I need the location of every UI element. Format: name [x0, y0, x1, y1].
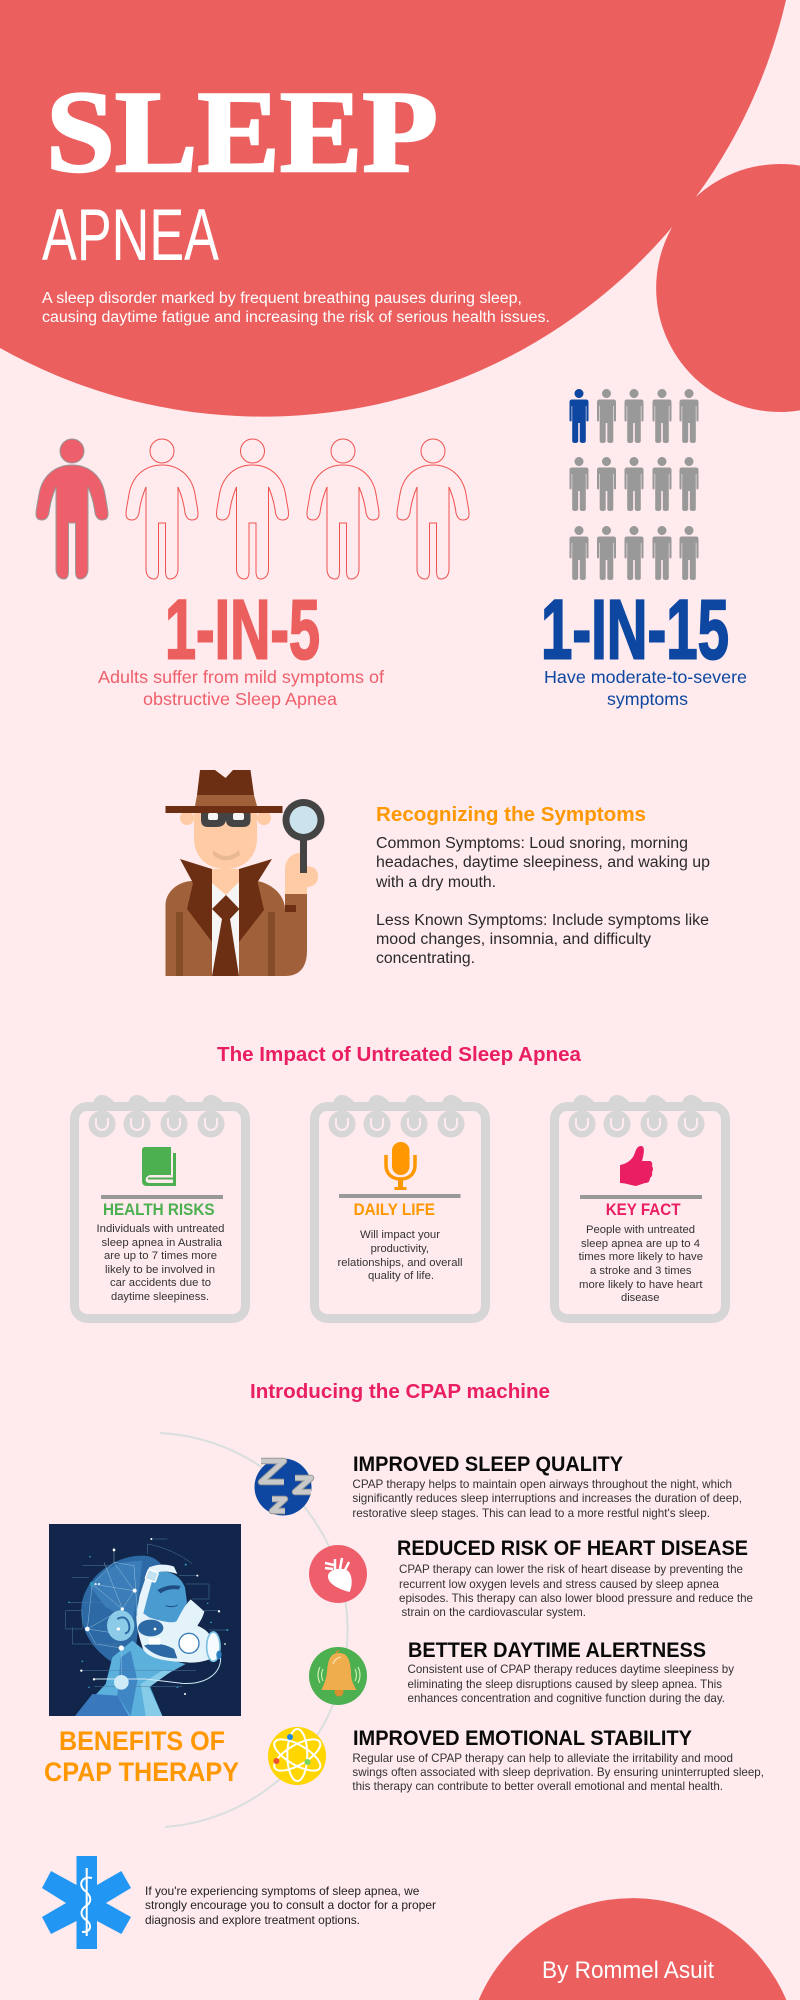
text block: symptoms: with a dry mouth. [375, 874, 496, 891]
closing advice text: If you're experiencing symptoms of sleep apnea, we [145, 1884, 420, 1898]
text block: better daytime alertness: BETTER DAYTIME ALERTNESS [408, 1638, 706, 1662]
heading: benefits of CPAP therapy: CPAP THERAPY [44, 1757, 239, 1787]
text block: improved emotional stability: this therapy can contribute to better overall emotional and mental health. [352, 1779, 723, 1793]
heading: recognizing the symptoms: Recognizing the Symptoms [376, 804, 646, 826]
text block: reduced risk of heart disease: recurrent low oxygen levels and stress caused by sleep apnea [399, 1577, 719, 1591]
header banner [0, 0, 800, 417]
icon: star of life [42, 1856, 131, 1949]
pictogram: 1 in 15 people [570, 389, 698, 580]
text block: improved sleep quality: CPAP therapy helps to maintain open airways throughout the night, which [352, 1477, 732, 1491]
connector arc [160, 1433, 348, 1827]
statistic caption: moderate-to-severe: Have moderate-to-severe [544, 667, 747, 687]
panel: key fact: times more likely to have [579, 1251, 703, 1263]
panel: key fact: KEY FACT [606, 1201, 680, 1219]
text block: reduced risk of heart disease: strain on the cardiovascular system. [402, 1605, 586, 1619]
icon: detective with magnifier [166, 770, 324, 976]
heading: impact of untreated sleep apnea: The Impact of Untreated Sleep Apnea [217, 1044, 582, 1066]
panel: health risks [74, 1095, 246, 1318]
author credit: By Rommel Asuit [542, 1957, 714, 1984]
panel: daily life: DAILY LIFE [354, 1201, 435, 1219]
statistic caption: mild symptoms: obstructive Sleep Apnea [143, 689, 337, 709]
panel: daily life: productivity, [371, 1243, 429, 1255]
closing advice text: strongly encourage you to consult a doctor for a proper [145, 1898, 436, 1912]
panel: daily life: Will impact your [360, 1229, 440, 1241]
panel: daily life: relationships, and overall [338, 1257, 462, 1269]
text block: symptoms: Common Symptoms: Loud snoring, morning [376, 835, 688, 852]
icon: heart [309, 1545, 367, 1603]
panel: health risks: sleep apnea in Australia [102, 1237, 223, 1249]
text block: symptoms: concentrating. [376, 950, 475, 967]
icon: thumbs up [620, 1146, 653, 1186]
text block: improved emotional stability [352, 1726, 764, 1793]
panel: health risks: car accidents due to [110, 1277, 211, 1289]
panel: key fact: disease [621, 1292, 659, 1304]
text block: improved sleep quality: restorative sleep stages. This can lead to a more restful night's sleep. [352, 1506, 710, 1520]
statistic caption: moderate-to-severe [544, 667, 747, 709]
text block: symptoms: Less Known Symptoms: Include symptoms like [376, 912, 709, 929]
text block: symptoms: headaches, daytime sleepiness, and waking up [376, 854, 710, 871]
icon: microphone [386, 1142, 415, 1190]
right accent circle [656, 164, 800, 412]
panel: health risks: daytime sleepiness. [111, 1291, 209, 1303]
panel: key fact [554, 1095, 726, 1318]
panel: key fact: sleep apnea are up to 4 [581, 1238, 700, 1250]
footer circle [479, 1898, 786, 2000]
text block: better daytime alertness: Consistent use of CPAP therapy reduces daytime sleepiness by [408, 1662, 734, 1676]
text block: reduced risk of heart disease: episodes. This therapy can also lower blood pressure and reduce the [399, 1591, 753, 1605]
icon: atom [268, 1727, 326, 1785]
text block: improved emotional stability: swings often associated with sleep deprivation. By ensuring uninterrupted sleep, [352, 1765, 764, 1779]
panel: health risks: Individuals with untreated [96, 1223, 224, 1235]
icon: bell [309, 1647, 367, 1705]
heading: benefits of CPAP therapy [44, 1726, 239, 1787]
text block: reduced risk of heart disease: REDUCED RISK OF HEART DISEASE [397, 1536, 748, 1560]
panel: key fact: more likely to have heart [579, 1279, 702, 1291]
icon: sleep zzz [254, 1458, 312, 1516]
illustration: head with CPAP mask [49, 1524, 241, 1716]
panel: health risks: likely to be involved in [105, 1264, 215, 1276]
panel: key fact: a stroke and 3 times [590, 1265, 692, 1277]
text block: improved sleep quality: significantly reduces sleep interruptions and increases the duration of deep, [352, 1491, 742, 1505]
statistic caption: mild symptoms [98, 667, 384, 709]
closing advice text: diagnosis and explore treatment options. [145, 1913, 360, 1927]
header description [42, 290, 550, 326]
closing advice text [145, 1884, 436, 1927]
panel: key fact: People with untreated [586, 1224, 695, 1236]
panel: health risks: are up to 7 times more [104, 1250, 217, 1262]
panel: daily life: quality of life. [368, 1270, 434, 1282]
statistic: 1-in-5: 1-IN-5 [165, 582, 320, 676]
statistic caption: mild symptoms: Adults suffer from mild symptoms of [98, 667, 384, 687]
text block: better daytime alertness: eliminating the sleep disruptions caused by sleep apnea. This [408, 1677, 722, 1691]
heading: benefits of CPAP therapy: BENEFITS OF [59, 1726, 225, 1756]
icon: book [142, 1147, 176, 1186]
text block: better daytime alertness: enhances concentration and cognitive function during the day. [408, 1691, 725, 1705]
large header circle [0, 0, 786, 417]
title: SLEEP: SLEEP [46, 68, 438, 197]
text block: improved emotional stability: IMPROVED EMOTIONAL STABILITY [353, 1726, 692, 1750]
text block: improved sleep quality [352, 1452, 742, 1520]
text block: reduced risk of heart disease: CPAP therapy can lower the risk of heart disease by preventing the [399, 1562, 743, 1576]
header description: A sleep disorder marked by frequent breathing pauses during sleep, [42, 290, 522, 307]
heading: introducing the CPAP machine: Introducing the CPAP machine [250, 1381, 550, 1403]
text block: symptoms [375, 835, 710, 967]
text block: reduced risk of heart disease [397, 1536, 753, 1619]
header description: causing daytime fatigue and increasing the risk of serious health issues. [42, 309, 550, 326]
statistic caption: moderate-to-severe: symptoms [607, 689, 688, 709]
text block: improved emotional stability: Regular use of CPAP therapy can help to alleviate the irritability and mood [352, 1751, 733, 1765]
text block: better daytime alertness [408, 1638, 734, 1705]
subtitle: APNEA: APNEA [42, 195, 219, 276]
text block: symptoms: mood changes, insomnia, and difficulty [376, 931, 651, 948]
panel: health risks: HEALTH RISKS [103, 1201, 214, 1219]
panel: daily life [314, 1095, 486, 1318]
text block: improved sleep quality: IMPROVED SLEEP QUALITY [353, 1452, 623, 1476]
pictogram: 1 in 5 people [36, 439, 469, 579]
